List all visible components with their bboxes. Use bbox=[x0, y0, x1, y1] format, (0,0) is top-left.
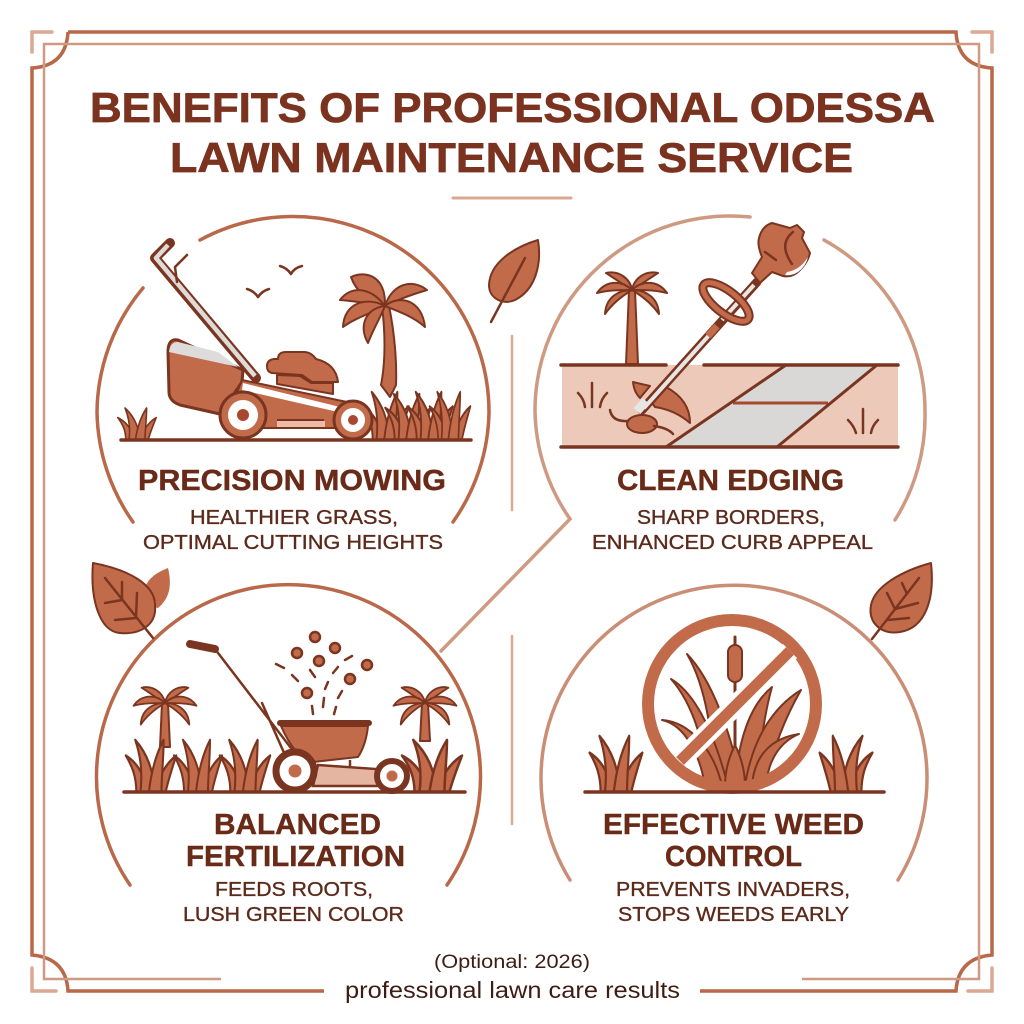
description: HEALTHIER GRASS, bbox=[190, 507, 398, 529]
icon: leaves bbox=[92, 563, 170, 638]
heading: CONTROL bbox=[665, 841, 802, 873]
panel: balanced fertilization bbox=[92, 563, 481, 926]
heading: BALANCED bbox=[214, 809, 381, 841]
panel arc bbox=[97, 217, 489, 522]
icon: palm tree bbox=[340, 274, 427, 397]
icon: pavement scene bbox=[561, 365, 898, 447]
title: BENEFITS OF PROFESSIONAL ODESSA bbox=[90, 84, 935, 131]
footer note: professional lawn care results bbox=[345, 977, 680, 1003]
heading: CLEAN EDGING bbox=[617, 465, 844, 497]
description: PREVENTS INVADERS, bbox=[616, 879, 850, 901]
title: LAWN MAINTENANCE SERVICE bbox=[170, 134, 853, 181]
description bbox=[616, 879, 850, 926]
panel arc bbox=[541, 585, 927, 880]
icon: leaf top center bbox=[489, 240, 539, 322]
description: ENHANCED CURB APPEAL bbox=[592, 532, 873, 554]
icon: leaf bbox=[871, 563, 932, 639]
description: FEEDS ROOTS, bbox=[215, 879, 373, 901]
wheels bbox=[220, 392, 372, 439]
icon: string trimmer bbox=[610, 223, 810, 434]
icon: birds bbox=[247, 266, 302, 297]
description bbox=[183, 879, 404, 926]
panel: precision mowing bbox=[97, 217, 489, 554]
icon: lawn mower bbox=[155, 243, 372, 439]
description: OPTIMAL CUTTING HEIGHTS bbox=[143, 532, 443, 554]
heading: FERTILIZATION bbox=[186, 841, 405, 873]
footer note bbox=[345, 952, 680, 1003]
description bbox=[143, 507, 443, 554]
heading bbox=[186, 809, 405, 873]
description: SHARP BORDERS, bbox=[637, 507, 825, 529]
icon: fertilizer seeds bbox=[276, 632, 372, 714]
icon: prohibited weed bbox=[648, 620, 816, 788]
footer note: (Optional: 2026) bbox=[434, 952, 590, 973]
panel: effective weed control bbox=[541, 563, 932, 926]
heading bbox=[603, 809, 864, 873]
heading: PRECISION MOWING bbox=[138, 465, 446, 497]
icon: grass bbox=[118, 392, 470, 440]
panel: clean edging bbox=[441, 216, 925, 651]
heading: EFFECTIVE WEED bbox=[603, 809, 864, 841]
panel arc bbox=[96, 585, 481, 885]
icon: palm tree bbox=[597, 272, 667, 364]
description: STOPS WEEDS EARLY bbox=[618, 904, 849, 926]
icon: palm trees bbox=[134, 687, 456, 747]
icon: spreader bbox=[190, 644, 407, 791]
description bbox=[592, 507, 873, 554]
panel arc bbox=[441, 216, 925, 651]
title bbox=[90, 84, 935, 181]
icon: grass bbox=[126, 740, 462, 792]
description: LUSH GREEN COLOR bbox=[183, 904, 404, 926]
icon: weed tufts bbox=[590, 736, 872, 792]
